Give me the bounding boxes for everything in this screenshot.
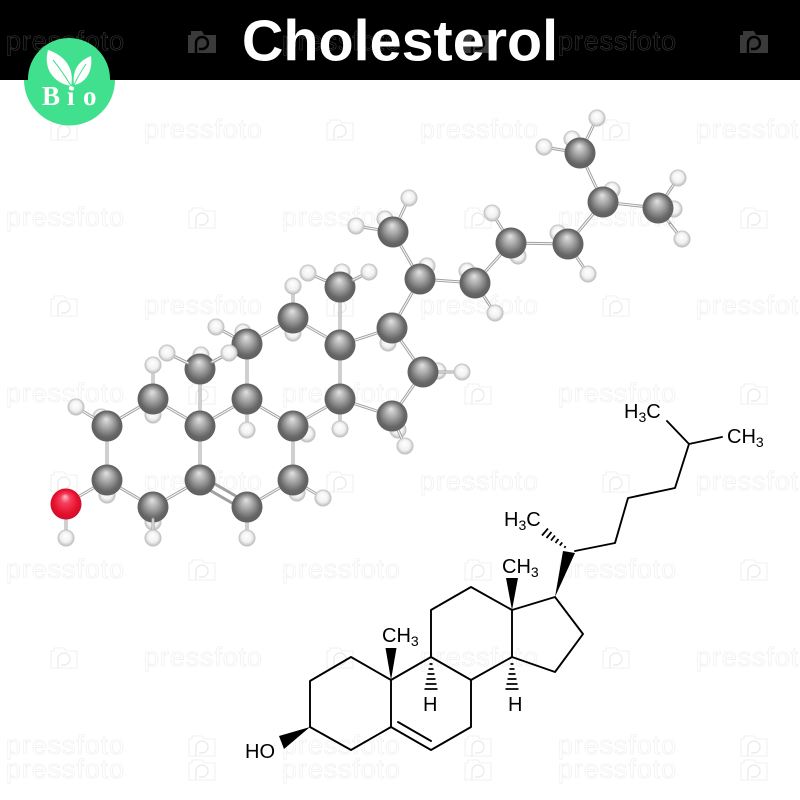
label: CH3 on C13: CH	[502, 556, 531, 578]
label: H on C14: H	[508, 694, 522, 716]
label: H3C terminal methyl: H	[624, 401, 638, 423]
label: HO group: HO	[245, 741, 275, 763]
title bar	[0, 0, 800, 80]
watermark pattern: pressfoto	[558, 554, 676, 584]
label: CH3 on C10: CH	[382, 625, 411, 647]
watermark pattern: pressfoto	[6, 730, 124, 760]
ball-and-stick model of cholesterol	[50, 110, 690, 546]
watermark pattern: pressfoto	[144, 290, 262, 320]
watermark pattern: pressfoto	[6, 202, 124, 232]
watermark pattern: pressfoto	[6, 26, 124, 56]
label: H3C side chain methyl: C	[526, 509, 541, 531]
title: Cholesterol	[242, 10, 558, 74]
watermark pattern: pressfoto	[558, 754, 676, 784]
watermark pattern: pressfoto	[282, 378, 400, 408]
watermark pattern: pressfoto	[558, 730, 676, 760]
watermark pattern: pressfoto	[420, 290, 538, 320]
watermark pattern: pressfoto	[6, 554, 124, 584]
label: H on C9: H	[423, 694, 437, 716]
watermark pattern: pressfoto	[420, 114, 538, 144]
watermark pattern: pressfoto	[6, 754, 124, 784]
label: CH3 on C13: 3	[531, 564, 539, 580]
label: CH3 terminal methyl: CH	[727, 426, 756, 448]
watermark pattern: pressfoto	[558, 202, 676, 232]
watermark pattern: pressfoto	[558, 378, 676, 408]
label: H3C terminal methyl: C	[646, 401, 661, 423]
icon: Bio logo badge: i	[67, 81, 75, 111]
watermark pattern: pressfoto	[144, 642, 262, 672]
watermark pattern: pressfoto	[6, 378, 124, 408]
watermark pattern: pressfoto	[282, 730, 400, 760]
watermark pattern: pressfoto	[282, 754, 400, 784]
watermark pattern: pressfoto	[282, 26, 400, 56]
label: CH3 on C10: 3	[411, 633, 419, 649]
label: CH3 terminal methyl: 3	[756, 434, 764, 450]
icon: Bio logo badge: B	[42, 81, 60, 111]
watermark pattern: pressfoto	[282, 554, 400, 584]
icon: Bio logo badge: o	[83, 81, 96, 111]
skeletal formula of cholesterol	[279, 421, 722, 750]
watermark pattern: pressfoto	[144, 114, 262, 144]
label: H3C side chain methyl: 3	[518, 517, 526, 533]
watermark pattern: pressfoto	[144, 466, 262, 496]
watermark pattern: pressfoto	[420, 466, 538, 496]
watermark pattern: pressfoto	[558, 26, 676, 56]
label: H3C side chain methyl: H	[504, 509, 518, 531]
watermark pattern: pressfoto	[420, 642, 538, 672]
label: H3C terminal methyl: 3	[638, 409, 646, 425]
watermark pattern: pressfoto	[282, 202, 400, 232]
icon: Bio logo badge	[24, 34, 115, 126]
